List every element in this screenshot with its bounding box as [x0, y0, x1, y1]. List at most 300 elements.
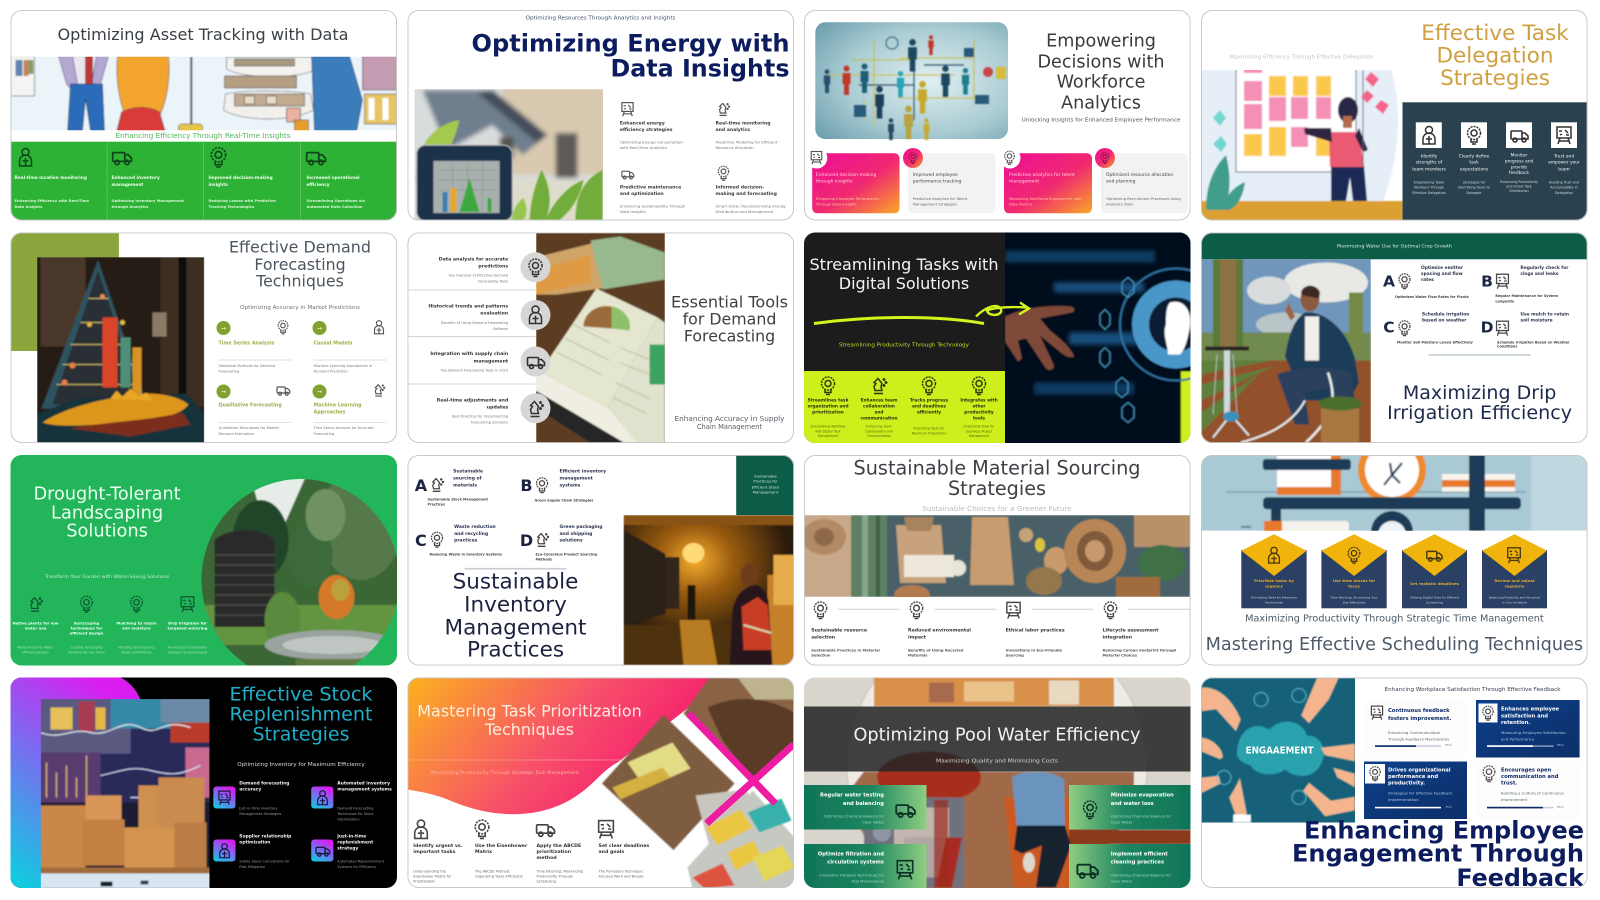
method descriptions: The Pomodoro Technique:	[598, 870, 644, 874]
panel: organizational performance: Implementation	[1388, 797, 1419, 802]
olive accent block	[10, 232, 119, 351]
feature descriptions: Smart Grids: Revolutionizing Energy	[716, 204, 787, 208]
feature descriptions: Retain Soil Moisture	[121, 651, 152, 655]
panel: satisfaction: satisfaction and	[1501, 714, 1548, 720]
title: Sustainable Material Sourcing	[854, 456, 1140, 479]
panel: open communication: Building a Culture of Continuous	[1501, 790, 1564, 796]
technique descriptions: Demand Prediction	[314, 370, 348, 374]
illustration: clocks and shelves	[1201, 455, 1588, 531]
strategy descriptions: Automated Replenishment	[337, 860, 385, 864]
card: predictive analytics	[1000, 148, 1092, 213]
title: Forecasting	[254, 255, 346, 274]
card: performance tracking: performance tracking	[913, 179, 962, 185]
technique names: Time Series Analysis	[218, 340, 274, 346]
strategy names: Automated inventory	[337, 780, 390, 786]
icon tile: supplier	[213, 840, 236, 862]
method names: Set clear deadlines	[598, 843, 649, 849]
practice descriptions: Practices	[428, 502, 445, 506]
method descriptions: Productivity Through	[536, 874, 573, 878]
panel: organizational performance: productivity.	[1388, 780, 1425, 786]
letter markers: D	[520, 531, 533, 550]
title: Strategies	[948, 477, 1046, 500]
card: decision-making: Enhancing Employee Performance	[816, 197, 880, 201]
feature labels: productivity	[964, 410, 994, 416]
subtitle: Maximizing Quality and Minimizing Costs	[936, 758, 1058, 764]
feature labels: organization and	[807, 404, 849, 410]
practice descriptions: Optimizes Water Flow Rates for Plants	[1395, 295, 1469, 299]
letter markers	[415, 476, 533, 550]
icon: gear	[431, 532, 443, 547]
practice grid	[1383, 265, 1570, 348]
feature labels: management	[112, 182, 143, 188]
feature descriptions: Solutions for Any Home	[68, 651, 105, 655]
green label box: Practices for	[753, 478, 778, 484]
title: Delegation	[1436, 44, 1554, 69]
icon badges	[520, 252, 550, 423]
title: Essential Tools	[671, 292, 788, 312]
feature labels	[13, 621, 208, 635]
icon tile: automated	[311, 786, 333, 808]
feature descriptions: Maximum Productivity	[912, 432, 946, 436]
card: resource allocation: Optimized resource allocation	[1106, 172, 1173, 178]
tool descriptions: Forecasting Tools	[478, 280, 508, 284]
letter markers: A	[415, 476, 428, 495]
card: Optimizing Asset Tracking with Data	[10, 10, 398, 221]
feature descriptions: Creative Xeriscaping	[71, 646, 102, 650]
tool descriptions: Top Demand Forecasting Tools in 2023	[440, 368, 508, 372]
feature labels	[807, 398, 998, 422]
feature descriptions: Resource Allocation	[716, 145, 754, 150]
practice descriptions: Sustainable Stock Management	[428, 497, 488, 501]
icon: board	[1497, 274, 1508, 289]
panel: organizational performance: Drives organizational	[1388, 768, 1451, 774]
practice descriptions: Regular Maintenance for System	[1495, 294, 1558, 298]
feature descriptions: Selection	[811, 654, 831, 658]
tool list	[408, 252, 550, 424]
step card 4: Balancing Flexibility and Structure	[1489, 595, 1540, 599]
tool descriptions: Forecasting Solutions	[471, 420, 508, 424]
panel: continuous feedback: 55%	[1445, 743, 1452, 747]
photo: house and energy meter	[414, 89, 603, 220]
feature labels: making and forecasting	[716, 191, 777, 197]
title: Empowering	[1046, 32, 1156, 52]
feature labels: water use	[25, 626, 47, 630]
practice names: sourcing of	[453, 476, 482, 482]
icon: person	[374, 321, 384, 334]
card: Sustainable Inventory Management Practices	[408, 455, 794, 666]
feature descriptions: Automated Data Collection	[306, 205, 363, 209]
card: Effective Stock Replenishment Strategies	[10, 678, 397, 888]
feature labels: Tracks progress	[910, 398, 949, 404]
feature labels	[811, 628, 1159, 641]
feature descriptions	[811, 424, 995, 438]
title: Replenishment	[230, 704, 372, 726]
arrow glyphs: →	[221, 388, 226, 396]
panel: satisfaction: Enhances employee	[1501, 706, 1559, 712]
strategy labels: empower your	[1548, 160, 1580, 166]
panel: evaporation: Minimize evaporation	[1111, 792, 1174, 798]
feature labels: impact	[908, 635, 927, 641]
strategy descriptions: Just-in-Time Inventory	[238, 806, 278, 810]
method names: Matrix	[475, 849, 492, 855]
panel: organizational performance	[1364, 762, 1467, 819]
subtitle	[674, 415, 785, 431]
eyebrow: Optimizing Resources Through Analytics and Insights	[526, 16, 676, 22]
panel: organizational performance: performance and	[1388, 774, 1438, 780]
tool names	[428, 256, 509, 410]
icon: resource	[814, 602, 827, 619]
strategy labels: task	[1469, 160, 1479, 166]
panel: water testing: Optimizing Chemical Balance for	[824, 814, 884, 818]
feature labels: Enhances team	[861, 398, 898, 404]
icon: team gear	[415, 820, 427, 838]
card: decision-making: Through Data Insights	[815, 203, 857, 207]
feature labels: Real-time monitoring	[716, 120, 771, 126]
title	[1387, 382, 1572, 424]
photo: person with water infographic	[804, 618, 1191, 900]
step card 2	[1321, 534, 1387, 608]
card: Mastering Effective Scheduling Techniques	[1201, 436, 1588, 666]
card: predictive analytics: management	[1009, 179, 1039, 185]
icon: gears	[1399, 274, 1410, 289]
feature labels: prioritization	[812, 410, 844, 416]
practice names	[453, 469, 606, 544]
icon: worker	[20, 148, 32, 166]
panel: satisfaction: and Performance	[1501, 736, 1535, 742]
icon: sensor	[1399, 321, 1410, 336]
practice descriptions	[428, 497, 598, 562]
technique descriptions: Forecasting	[314, 432, 334, 436]
panel: cleaning: Optimizing Chemical Balance for	[1111, 874, 1172, 878]
title	[34, 483, 181, 542]
method descriptions: Organizing Tasks Efficiently	[475, 874, 523, 878]
technique descriptions: Qualitative Techniques for Market	[218, 426, 279, 430]
card: Optimizing Pool Water Efficiency	[804, 618, 1191, 900]
card: predictive analytics: Data Metrics	[1009, 203, 1032, 207]
title: Enhancing Employee	[1304, 816, 1584, 844]
feature labels: Native plants for low	[13, 621, 59, 626]
practice names: rates	[1421, 277, 1434, 283]
icon: knight	[530, 402, 543, 416]
photo: kraft materials flat lay	[804, 515, 1190, 597]
card: resource allocation: and planning	[1106, 179, 1136, 185]
feature descriptions: with Digital Task	[815, 430, 841, 434]
card: Mastering Task Prioritization Techniques	[408, 678, 794, 888]
feature descriptions: Optimizing Inventory Management	[112, 199, 184, 203]
panel: open communication: trust.	[1501, 780, 1517, 786]
card: Streamlining Tasks with Digital Solutions	[804, 230, 1232, 444]
feature labels: Ethical labor practices	[1006, 628, 1065, 634]
icon: growth	[538, 534, 549, 546]
feature labels: efficiently	[917, 410, 941, 416]
dark strategy panel	[1402, 102, 1588, 221]
feature labels: Drip irrigation for	[168, 621, 207, 626]
strategy labels: team	[1558, 167, 1570, 173]
feature descriptions: Prioritizing Tasks for	[914, 426, 945, 430]
method names: prioritization	[536, 849, 571, 855]
letter markers: C	[1383, 318, 1395, 336]
feature labels: Lifecycle assessment	[1102, 628, 1159, 634]
step card 1	[1241, 534, 1307, 608]
panel: continuous feedback: Enhancing Communication	[1388, 730, 1441, 735]
tool names: predictions	[478, 263, 508, 269]
method descriptions: The ABCDE Method:	[474, 870, 510, 874]
practice names: management	[560, 476, 594, 482]
feature descriptions: Streamlining Operations via	[306, 199, 365, 203]
panel: organizational performance: Strategies for Effective Feedback	[1388, 790, 1453, 796]
icon tile: gear	[1461, 122, 1487, 148]
panel: satisfaction: 65%	[1557, 743, 1564, 747]
step card 1: urgency	[1265, 584, 1283, 589]
icon: globe gear	[536, 478, 548, 493]
technique descriptions: Demand Estimation	[218, 432, 254, 436]
photo: hand touching digital lens	[1005, 232, 1190, 443]
step card 2: focus	[1348, 584, 1361, 589]
method names: method	[536, 855, 557, 861]
strategy descriptions: Empowering Team	[1414, 180, 1444, 184]
method descriptions: Prioritization	[413, 880, 435, 884]
method descriptions: Understanding the	[413, 870, 446, 874]
feature descriptions: Approach to Landscaping	[168, 651, 207, 655]
feature labels: Integrates with	[960, 398, 998, 404]
photo circle: rain tank in garden	[196, 470, 406, 670]
icon: gear bulb	[211, 148, 226, 167]
technique descriptions: Statistical Methods for Demand	[218, 364, 275, 368]
panel: evaporation: Optimizing Chemical Balance for	[1111, 814, 1172, 818]
practice names: Sustainable	[453, 469, 483, 475]
feature labels: Sustainable resource	[811, 628, 867, 634]
title: Drought-Tolerant	[34, 483, 181, 504]
green feature band	[10, 142, 398, 221]
feature labels: tools	[973, 416, 985, 422]
tool names: Real-time adjustments and	[437, 398, 508, 404]
title	[854, 456, 1140, 500]
practice grid	[415, 469, 606, 562]
feature descriptions: Seamless Project	[966, 430, 993, 434]
feature descriptions: Enhancing Team	[866, 424, 892, 428]
gradient accent shape	[10, 678, 142, 888]
method descriptions: Eisenhower Matrix for	[413, 874, 452, 878]
technique descriptions: Machine Learning Approaches in	[314, 364, 372, 368]
technique names: Approaches	[314, 410, 345, 416]
practice descriptions: Monitor Soil Moisture Levels Effectively	[1397, 340, 1474, 344]
header band	[1201, 232, 1588, 259]
subtitle: Optimizing Accuracy in Market Predictions	[240, 305, 360, 311]
feature labels: Xeriscaping	[74, 621, 100, 626]
title	[810, 255, 998, 293]
title: Sustainable	[453, 569, 578, 594]
title: Inventory	[464, 593, 567, 618]
icon: chess knight	[375, 385, 385, 396]
title: Effective Stock	[230, 684, 372, 706]
title	[229, 237, 371, 291]
feature descriptions	[811, 648, 1177, 658]
feature timeline	[811, 602, 1190, 658]
method names: and goals	[598, 849, 624, 855]
strategy descriptions: Safety Stock Calculations for	[239, 860, 290, 864]
feature labels: and optimization	[620, 191, 664, 197]
feature labels: and	[874, 410, 884, 416]
icon: plant	[31, 598, 42, 611]
strategy names: replenishment	[337, 840, 373, 846]
title: Strategies	[1440, 66, 1550, 91]
feature descriptions: Sourcing	[1006, 654, 1024, 658]
strategy descriptions: Effective Delegation	[1412, 191, 1446, 195]
title: Maximizing Drip	[1403, 382, 1556, 404]
panel: filtration: Innovative Filtration Techniques for	[819, 874, 884, 878]
title: Practices	[467, 638, 564, 663]
practice names: Green packaging	[560, 524, 602, 530]
practice names: soil moisture	[1520, 318, 1553, 324]
feature descriptions: Mulching Techniques to	[118, 646, 155, 650]
strategy labels: progress and	[1505, 159, 1534, 165]
feature descriptions: Optimizing Energy Consumption	[620, 140, 683, 144]
step card 1: Productivity	[1265, 600, 1283, 604]
icon tile: just-in-time	[311, 840, 333, 862]
strategy descriptions: Systems for Efficiency	[337, 865, 376, 869]
step card 2: Time Blocking: Structuring Your	[1329, 595, 1378, 599]
title: Feedback	[1456, 864, 1585, 892]
practice descriptions: Reducing Waste in Inventory Systems	[430, 553, 502, 557]
lime feature band	[804, 371, 1005, 444]
feature descriptions: Predictive Modeling for Efficient	[716, 140, 778, 144]
scribble arrow	[814, 302, 1029, 324]
method names: Identify urgent vs.	[413, 843, 463, 849]
photo: warehouse worker at night	[624, 515, 794, 666]
practice descriptions: Green Supply Chain Strategies	[534, 499, 593, 503]
strategy labels: expectations	[1460, 167, 1489, 173]
tool names: updates	[487, 404, 508, 410]
title: Solutions	[66, 521, 148, 542]
strategy names: optimization	[239, 840, 270, 846]
technique names: Causal Models	[314, 340, 352, 346]
card: decision-making: Enhanced decision-making	[816, 172, 877, 178]
practice descriptions: Conditions	[1497, 344, 1517, 348]
feature descriptions: Streamlining Workflow	[811, 424, 846, 428]
icon: gear bulb	[475, 820, 489, 838]
panel: continuous feedback: Through Feedback Mechanisms	[1387, 736, 1449, 742]
strategy descriptions	[238, 806, 385, 869]
technique descriptions: Forecasting	[218, 370, 239, 374]
practice names: materials	[453, 483, 477, 489]
title: Forecasting	[684, 326, 775, 346]
subtitle: Sustainable Choices for a Greener Future	[922, 505, 1072, 513]
card: Maximizing Drip Irrigation Efficiency	[1201, 232, 1588, 444]
method names: Apply the ABCDE	[536, 843, 581, 849]
practice names: systems	[560, 483, 581, 489]
step card 1: Prioritize tasks by	[1254, 578, 1294, 583]
card: decision-making: through insights	[816, 179, 853, 185]
subtitle: Enhancing Efficiency Through Real-Time Insights	[116, 132, 291, 140]
method descriptions	[413, 870, 644, 884]
tool descriptions: Best Practices for Implementing	[452, 414, 508, 418]
feature descriptions: Management	[818, 434, 839, 438]
feature labels: targeted watering	[168, 626, 208, 630]
feature descriptions: Data Insights	[620, 209, 646, 214]
tool descriptions	[440, 274, 508, 424]
icon: engine	[528, 358, 544, 368]
letter markers	[1383, 272, 1494, 336]
method descriptions: Scheduling	[536, 880, 556, 884]
strategy descriptions: Accountability in	[1550, 186, 1578, 190]
feature labels: Enhanced energy	[620, 120, 665, 126]
subtitle: Maximizing Productivity Through Strategic Task Management	[431, 770, 579, 776]
strategy grid	[213, 780, 392, 869]
technique descriptions	[218, 364, 374, 436]
strategy names: strategy	[337, 846, 358, 852]
feature descriptions: Innovations in Eco-Friendly	[1006, 648, 1063, 652]
panel: continuous feedback	[1364, 700, 1467, 758]
title	[1038, 32, 1164, 113]
title: Optimizing Pool Water Efficiency	[854, 726, 1140, 746]
technique names: Machine Learning	[314, 402, 362, 408]
feature descriptions: Reducing Carbon Footprint through	[1102, 648, 1177, 652]
strategy descriptions	[1412, 180, 1579, 195]
feature descriptions: Distribution and Management	[716, 209, 774, 214]
feature labels: Increased operational	[306, 175, 360, 181]
feature labels: selection	[811, 635, 835, 641]
panel: filtration: Pool Maintenance	[851, 880, 885, 884]
feature labels: Streamlines task	[808, 398, 849, 404]
method names: Use the Eisenhower	[475, 843, 528, 849]
icon: bulb	[922, 377, 936, 394]
panel: open communication: communication and	[1501, 774, 1559, 780]
card: Empowering Decisions with Workforce Analytics	[804, 10, 1190, 220]
feature descriptions	[17, 646, 207, 655]
feature labels: and analytics	[716, 127, 750, 133]
feature descriptions	[14, 200, 365, 208]
icon: dashboard	[622, 103, 633, 116]
title: Optimizing Asset Tracking with Data	[58, 25, 348, 44]
panel: cleaning: cleaning practices	[1111, 860, 1164, 866]
icon: engine	[277, 387, 290, 395]
feature grid	[620, 103, 787, 214]
practice names: practices	[454, 538, 478, 544]
green label box: Management	[753, 490, 779, 494]
icon: reduced impact	[910, 602, 923, 619]
icon: gears	[718, 166, 729, 180]
title: Management	[444, 615, 586, 640]
green label box: Sustainable	[754, 473, 777, 478]
icon: mulch	[1497, 321, 1508, 336]
title: Analytics	[1061, 93, 1141, 113]
practice names: Efficient inventory	[560, 469, 606, 475]
title: Strategies	[252, 724, 350, 746]
card: predictive analytics: Measuring Workforce Engagement with	[1009, 197, 1082, 201]
practice names: based on weather	[1422, 318, 1467, 324]
title: Landscaping	[51, 502, 163, 523]
card: performance tracking	[903, 148, 995, 213]
card: resource allocation: Optimizing Recruitment Processes Using	[1106, 197, 1181, 201]
feature labels: and deadlines	[912, 404, 946, 410]
subtitle: Maximizing Productivity Through Strategic Time Management	[1245, 613, 1544, 624]
arrow badges	[216, 321, 326, 398]
header band: Maximizing Water Use for Optimal Crop Growth	[1337, 244, 1452, 250]
title	[472, 30, 790, 83]
strategy descriptions: Enhancing Productivity	[1500, 180, 1538, 184]
practice descriptions: Eco-Conscious Product Sourcing	[536, 553, 598, 557]
feature descriptions: Material Choices	[1102, 654, 1138, 658]
practice names: Schedule irrigation	[1422, 312, 1469, 318]
strategy descriptions: Delegate	[1467, 191, 1481, 195]
icon: truck	[113, 153, 131, 165]
tool descriptions: Benefits of Using Demand Forecasting	[441, 321, 508, 325]
green label box	[736, 455, 794, 515]
strategy labels: Trust and	[1553, 153, 1574, 159]
icon tile: team	[1416, 122, 1442, 148]
letter markers: A	[1383, 272, 1395, 290]
feature labels	[620, 120, 777, 197]
